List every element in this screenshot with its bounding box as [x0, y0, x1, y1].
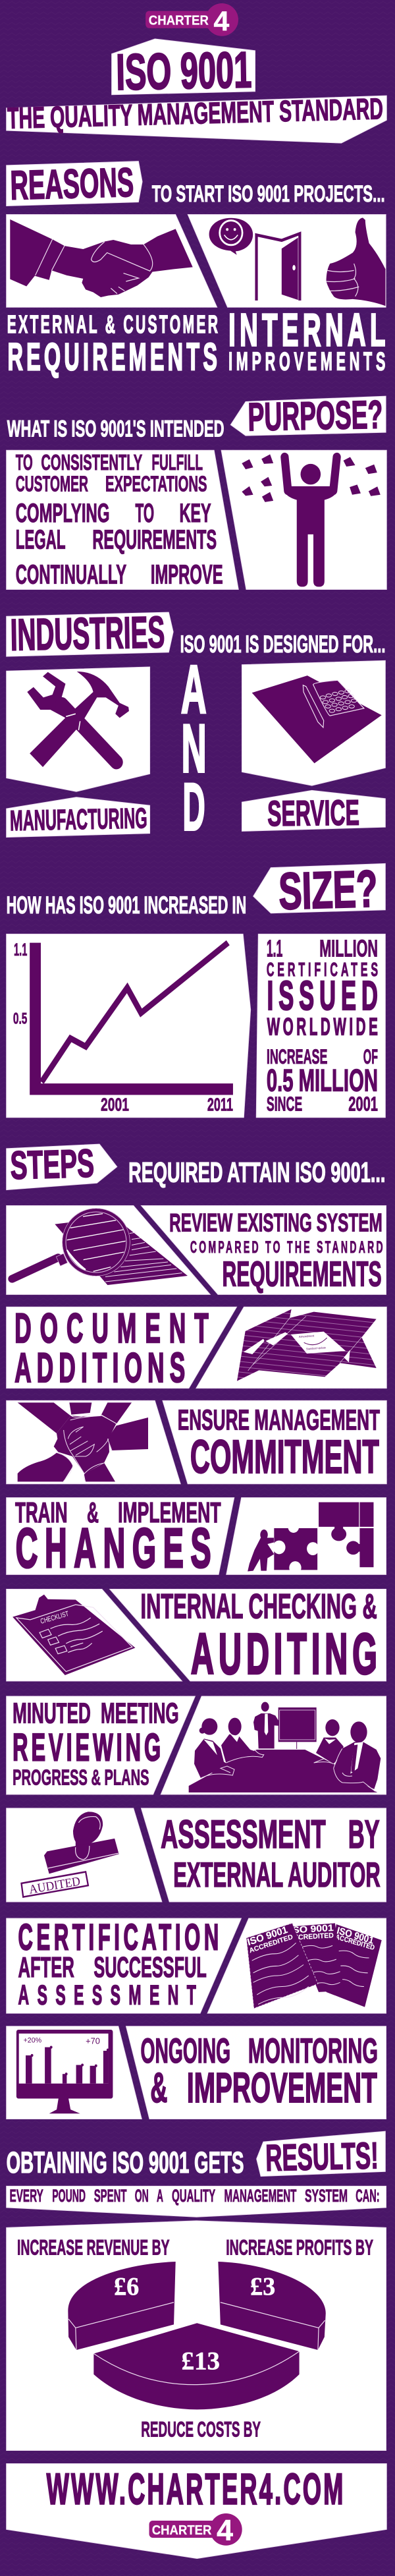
banner: every pound spent: ON	[135, 2187, 149, 2206]
logo: Charter 4 footer: CHARTER	[152, 2523, 211, 2538]
heading text: what is intended: WHAT IS ISO 9001'S INTENDED	[7, 416, 224, 442]
text: fulfil customer expectations: CONSISTENTLY	[41, 450, 142, 474]
panel: step 4 puzzle icon	[226, 1498, 386, 1574]
panel: certificate statistics: OF	[363, 1046, 378, 1068]
label: increase revenue: INCREASE REVENUE BY	[17, 2236, 170, 2260]
text: vertical AND: A	[181, 652, 207, 728]
panel: certificate statistics: CERTIFICATES	[267, 959, 378, 980]
banner: every pound spent: CAN:	[356, 2187, 380, 2206]
text: continually improve: CONTINUALLY	[16, 559, 126, 590]
icon: certificates: ACCREDITED	[288, 1932, 334, 1942]
panel: step 7 icon background	[7, 1808, 162, 1902]
panel: step 5 internal checking and auditing	[109, 1587, 386, 1686]
text: fulfil customer expectations: CUSTOMER	[16, 471, 88, 496]
text: complying to legal requirements: REQUIREMENTS	[92, 525, 217, 555]
chart: costs slice: £13	[182, 2347, 220, 2376]
banner: every pound spent: EVERY	[10, 2187, 43, 2206]
icon: certificates: ISO 9001	[289, 1922, 334, 1935]
text: vertical AND: N	[182, 711, 207, 787]
section: purpose and industries	[7, 450, 386, 844]
icon: hammer and wrench	[27, 672, 129, 767]
icon: person with raised arms	[284, 457, 337, 587]
text: complying to legal requirements: KEY	[179, 498, 211, 528]
panel: step 8 certification: SUCCESSFUL	[93, 1951, 207, 1983]
panel: step 8 certification: ASSESSMENT	[18, 1981, 196, 2011]
label: external & customer requirements: REQUIREMENTS	[7, 336, 217, 379]
heading text: how has it increased: HOW HAS ISO 9001 INCREASED IN	[7, 892, 246, 919]
panel: step 8 certification: AFTER	[18, 1951, 74, 1983]
icon: certificates: ISO 9001	[336, 1926, 375, 1947]
panel: step 3 ensure management commitment	[163, 1400, 386, 1484]
panel: step 4 train and implement changes: TRAIN	[15, 1496, 68, 1528]
section: header and reasons	[7, 3, 386, 442]
icon: monitor with bar chart	[16, 2030, 113, 2113]
chart: growth line	[41, 943, 228, 1082]
text: vertical AND: D	[182, 769, 205, 844]
icon: open door	[257, 233, 300, 301]
panel: step 2 icon background	[196, 1307, 386, 1388]
chart: axis labels: 1.1	[14, 940, 27, 959]
heading: reasons	[7, 159, 142, 208]
panel: certificate statistics: 2001	[348, 1094, 378, 1116]
panel: step 5 icon background	[7, 1589, 182, 1681]
icon: certificates: ACCREDITED	[334, 1933, 375, 1952]
text: vertical AND	[181, 652, 207, 844]
panel: external requirements	[7, 214, 217, 307]
label: internal improvements: INTERNAL	[228, 304, 385, 355]
icon: document sheets with stripes	[237, 1309, 377, 1381]
panel: step 8 certification	[7, 1916, 242, 2013]
label: external & customer requirements: EXTERNAL & CUSTOMER	[7, 310, 218, 339]
panel: step 6 minuted meeting reviewing: MINUTED	[13, 1697, 91, 1729]
banner: every pound spent: QUALITY	[172, 2187, 215, 2206]
panel: step 9 ongoing monitoring and improvement: ONGOING	[141, 2031, 230, 2070]
logo: Charter 4: 4	[213, 7, 229, 37]
icon: thumbs up	[327, 217, 385, 306]
banner: every pound spent: MANAGEMENT	[224, 2187, 297, 2206]
heading: industries: INDUSTRIES	[10, 607, 165, 660]
title: ISO 9001: ISO 9001	[116, 41, 252, 101]
panel: certificate statistics: WORLDWIDE	[267, 1014, 378, 1041]
panel: purpose list	[7, 450, 238, 590]
chart: revenue slice	[68, 2262, 176, 2350]
panel: step 9 ongoing monitoring and improvement	[126, 2026, 386, 2119]
chart: axis labels	[13, 940, 233, 1115]
icon: monitor with bar chart: +70	[86, 2036, 100, 2046]
icon: boardroom meeting silhouettes	[189, 1702, 381, 1792]
panel: step 8 certificates icon	[207, 1918, 386, 2013]
chart: axis labels: 2001	[101, 1094, 129, 1115]
chart: revenue slice: £6	[114, 2272, 139, 2301]
icon: document, calculator and pen	[252, 675, 382, 763]
panel: step 2 document additions	[7, 1305, 237, 1391]
banner: every pound spent: SPENT	[94, 2187, 127, 2206]
chart: axes	[30, 943, 233, 1095]
icon: certificates: ACCREDITED	[248, 1933, 294, 1955]
panel: footer website: WWW.CHARTER4.COM	[47, 2465, 343, 2514]
section: size and steps heading	[7, 860, 386, 1295]
label: internal improvements: IMPROVEMENTS	[228, 347, 385, 376]
panel: step 2 document additions: DOCUMENT	[14, 1305, 209, 1352]
text: complying to legal requirements: LEGAL	[16, 525, 65, 555]
icon: joined hands	[18, 1402, 148, 1481]
logo: Charter 4	[145, 3, 238, 37]
label: external & customer requirements	[7, 310, 218, 379]
icon: handshake	[10, 219, 193, 297]
text: fulfil customer expectations: EXPECTATIONS	[105, 471, 207, 496]
chart: costs slice	[93, 2323, 300, 2409]
chart: profits slice	[218, 2262, 326, 2350]
banner: every pound spent: A	[157, 2187, 163, 2206]
panel: pie chart of returns	[7, 2221, 386, 2451]
text: continually improve: IMPROVE	[151, 559, 223, 590]
icon: rubber stamp: AUDITED	[28, 1874, 81, 1897]
text: complying to legal requirements: TO	[135, 498, 154, 528]
chart: axis labels: 0.5	[13, 1010, 27, 1027]
panel: certificate statistics: INCREASE	[267, 1046, 327, 1068]
icon: document sheets with stripes: Standard Update	[306, 1346, 327, 1350]
section: results and footer	[7, 2131, 386, 2559]
icon: smiley speech bubble	[209, 218, 253, 255]
banner: every pound spent	[7, 2186, 386, 2217]
text: fulfil customer expectations: FULFILL	[151, 450, 203, 474]
icon: magnifying glass over document	[12, 1208, 188, 1285]
icon: checklist clipboard: CHECKLIST	[40, 1611, 70, 1626]
panel: step 4 train and implement changes: IMPLEMENT	[118, 1496, 221, 1528]
icon: confetti	[242, 454, 381, 502]
icon: document sheets with stripes: Amendment	[299, 1334, 315, 1338]
logo: Charter 4: CHARTER	[149, 14, 209, 28]
text: complying to legal requirements: COMPLYING	[16, 498, 109, 528]
title: ISO 9001	[112, 39, 255, 101]
panel: step 6 minuted meeting reviewing	[7, 1696, 196, 1794]
panel: celebrating person	[221, 450, 386, 590]
icon: rubber stamp	[22, 1812, 119, 1897]
banner: every pound spent: POUND	[52, 2187, 86, 2206]
panel: step 4 train and implement changes: CHANGES	[16, 1518, 211, 1580]
panel: certificate statistics: 1.1	[267, 936, 282, 962]
label: manufacturing: MANUFACTURING	[10, 802, 147, 837]
panel: certificate statistics: ISSUED	[267, 973, 378, 1019]
panel: step 1 review existing system	[141, 1205, 386, 1295]
panel: step 5 internal checking and auditing: AUDITING	[191, 1621, 377, 1686]
icon: certificates: ISO 9001	[246, 1924, 289, 1948]
chart: profits slice: £3	[250, 2272, 275, 2301]
panel: step 6 icon background	[161, 1696, 386, 1794]
panel: step 2 document additions: ADDITIONS	[14, 1344, 185, 1391]
label: manufacturing	[7, 797, 150, 838]
panel: step 1 icon background	[7, 1205, 211, 1295]
panel: step 4 train and implement changes: &	[87, 1496, 99, 1528]
icon: checklist clipboard	[13, 1595, 135, 1675]
icon: puzzle pieces	[273, 1503, 373, 1574]
logo: Charter 4 footer	[149, 2513, 242, 2547]
panel: step 7 assessment by external auditor	[141, 1808, 386, 1902]
panel: growth line chart	[7, 934, 251, 1118]
heading: industries	[7, 607, 173, 660]
chart: axis labels: 2011	[207, 1094, 233, 1115]
panel: service icon	[242, 660, 385, 786]
panel: internal improvements	[188, 214, 386, 307]
panel: step 8 certification: CERTIFICATION	[18, 1916, 219, 1958]
text: fulfil customer expectations	[16, 450, 207, 496]
heading: reasons: REASONS	[10, 159, 134, 208]
panel: step 4 train and implement changes	[7, 1496, 234, 1580]
label: reduce costs: REDUCE COSTS BY	[141, 2418, 261, 2442]
panel: step 9 icon background	[7, 2026, 142, 2119]
icon: certificates	[246, 1922, 382, 2009]
section: steps 6 to 9	[7, 1696, 386, 2119]
text: fulfil customer expectations: TO	[16, 450, 33, 474]
panel: step 3 icon background	[7, 1400, 180, 1484]
panel: step 6 minuted meeting reviewing: REVIEWING	[13, 1726, 161, 1769]
panel: manufacturing icon	[7, 667, 150, 791]
panel: step 6 minuted meeting reviewing: PROGRESS & PLANS	[13, 1765, 149, 1790]
panel: step 6 minuted meeting reviewing: MEETING	[101, 1697, 179, 1729]
panel: certificate statistics	[256, 934, 385, 1118]
banner: every pound spent: SYSTEM	[305, 2187, 348, 2206]
icon: man pushing	[248, 1530, 274, 1571]
section: steps 2 to 5	[7, 1305, 386, 1686]
logo: Charter 4 footer: 4	[217, 2514, 234, 2547]
text: complying to legal requirements	[16, 498, 217, 555]
heading text: obtaining gets: OBTAINING ISO 9001 GETS	[7, 2146, 244, 2180]
panel: certificate statistics: SINCE	[267, 1094, 302, 1116]
panel: step 9 ongoing monitoring and improvement: &	[150, 2065, 167, 2111]
panel: footer website	[7, 2463, 386, 2559]
icon: monitor with bar chart: +20%	[24, 2037, 41, 2045]
heading: steps: STEPS	[10, 1142, 95, 1188]
panel: step 1 review existing system: COMPARED TO THE STANDARD	[190, 1239, 383, 1257]
